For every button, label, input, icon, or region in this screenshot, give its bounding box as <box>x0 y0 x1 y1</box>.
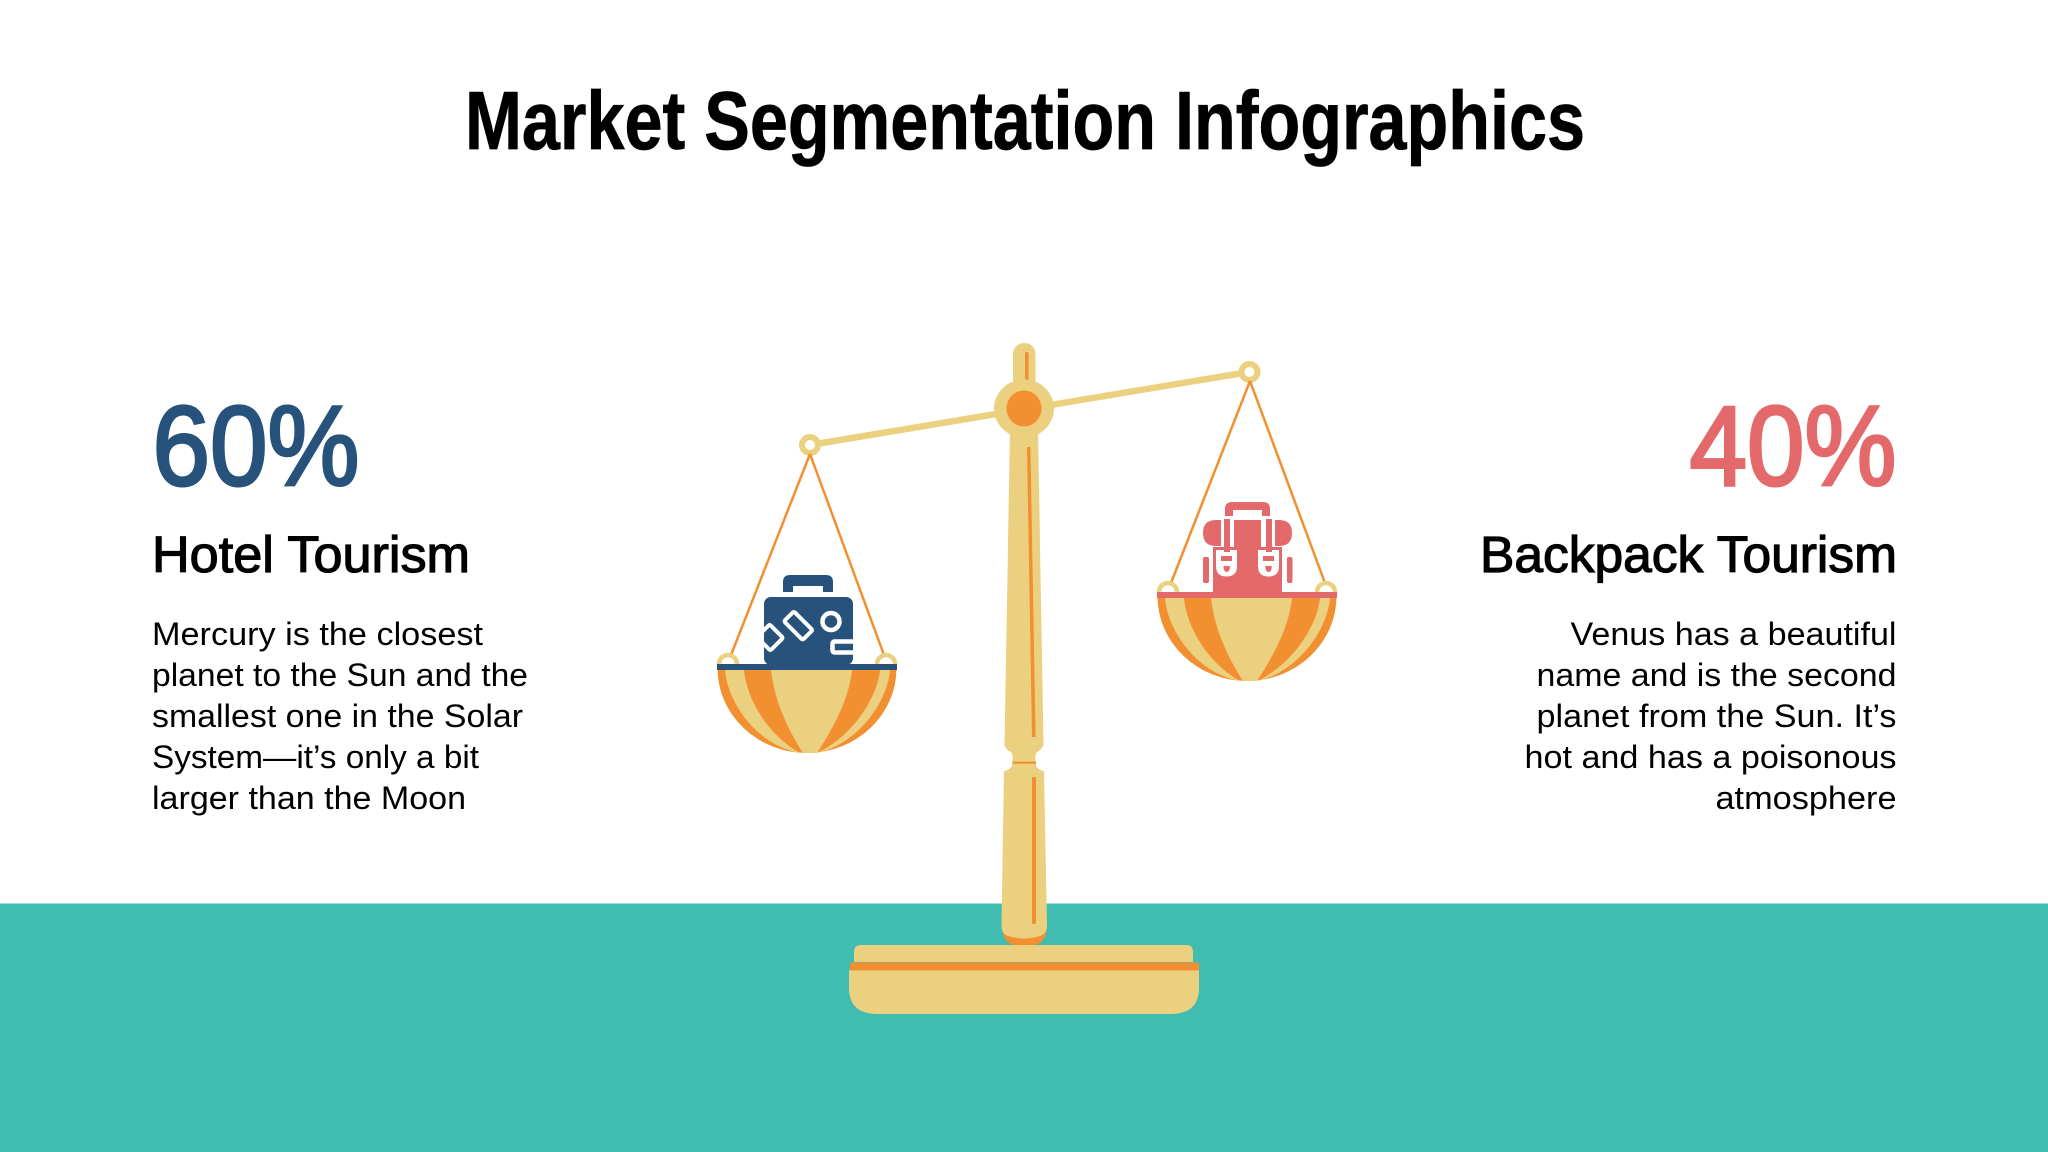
pack body <box>1213 547 1282 592</box>
beam ring left <box>802 437 818 453</box>
description: hotel tourism: System—it’s only a bit <box>152 739 479 775</box>
top roll <box>1203 520 1221 546</box>
buckles <box>1216 550 1237 576</box>
panel: hotel tourism <box>152 383 528 816</box>
right pan <box>1157 583 1337 681</box>
scale base <box>849 945 1199 1014</box>
description: backpack tourism: Venus has a beautiful <box>1570 616 1896 652</box>
side pockets <box>1203 557 1209 583</box>
left strings <box>731 454 884 655</box>
description: backpack tourism: name and is the second <box>1536 657 1896 693</box>
balance scale <box>717 343 1337 1014</box>
percentage: 40%: 40% <box>1690 383 1896 509</box>
heading: backpack tourism: Backpack Tourism <box>1480 526 1897 583</box>
description: hotel tourism: Mercury is the closest <box>152 616 483 652</box>
straps <box>1224 519 1230 552</box>
icon: suitcase <box>764 575 853 664</box>
description: backpack tourism <box>1524 616 1896 816</box>
description: hotel tourism: larger than the Moon <box>152 780 466 816</box>
scale column <box>1002 430 1047 945</box>
heading: hotel tourism: Hotel Tourism <box>152 526 470 583</box>
icon: backpack <box>1203 502 1292 592</box>
pivot <box>994 380 1054 438</box>
balance beam <box>810 372 1249 445</box>
description: backpack tourism: hot and has a poisonous <box>1524 739 1896 775</box>
left pan <box>717 655 897 753</box>
handle <box>1225 502 1270 516</box>
description: hotel tourism: planet to the Sun and the <box>152 657 528 693</box>
right strings <box>1171 381 1325 583</box>
description: backpack tourism: atmosphere <box>1716 780 1896 816</box>
description: hotel tourism: smallest one in the Solar <box>152 698 523 734</box>
title: Market Segmentation Infographics <box>465 74 1585 167</box>
teal ground band <box>0 904 2048 1152</box>
percentage: 60%: 60% <box>152 383 360 509</box>
beam ring right <box>1242 364 1258 380</box>
panel: backpack tourism <box>1480 383 1897 816</box>
top finial <box>1013 343 1036 403</box>
description: backpack tourism: planet from the Sun. It’s <box>1536 698 1896 734</box>
description: hotel tourism <box>152 616 528 816</box>
